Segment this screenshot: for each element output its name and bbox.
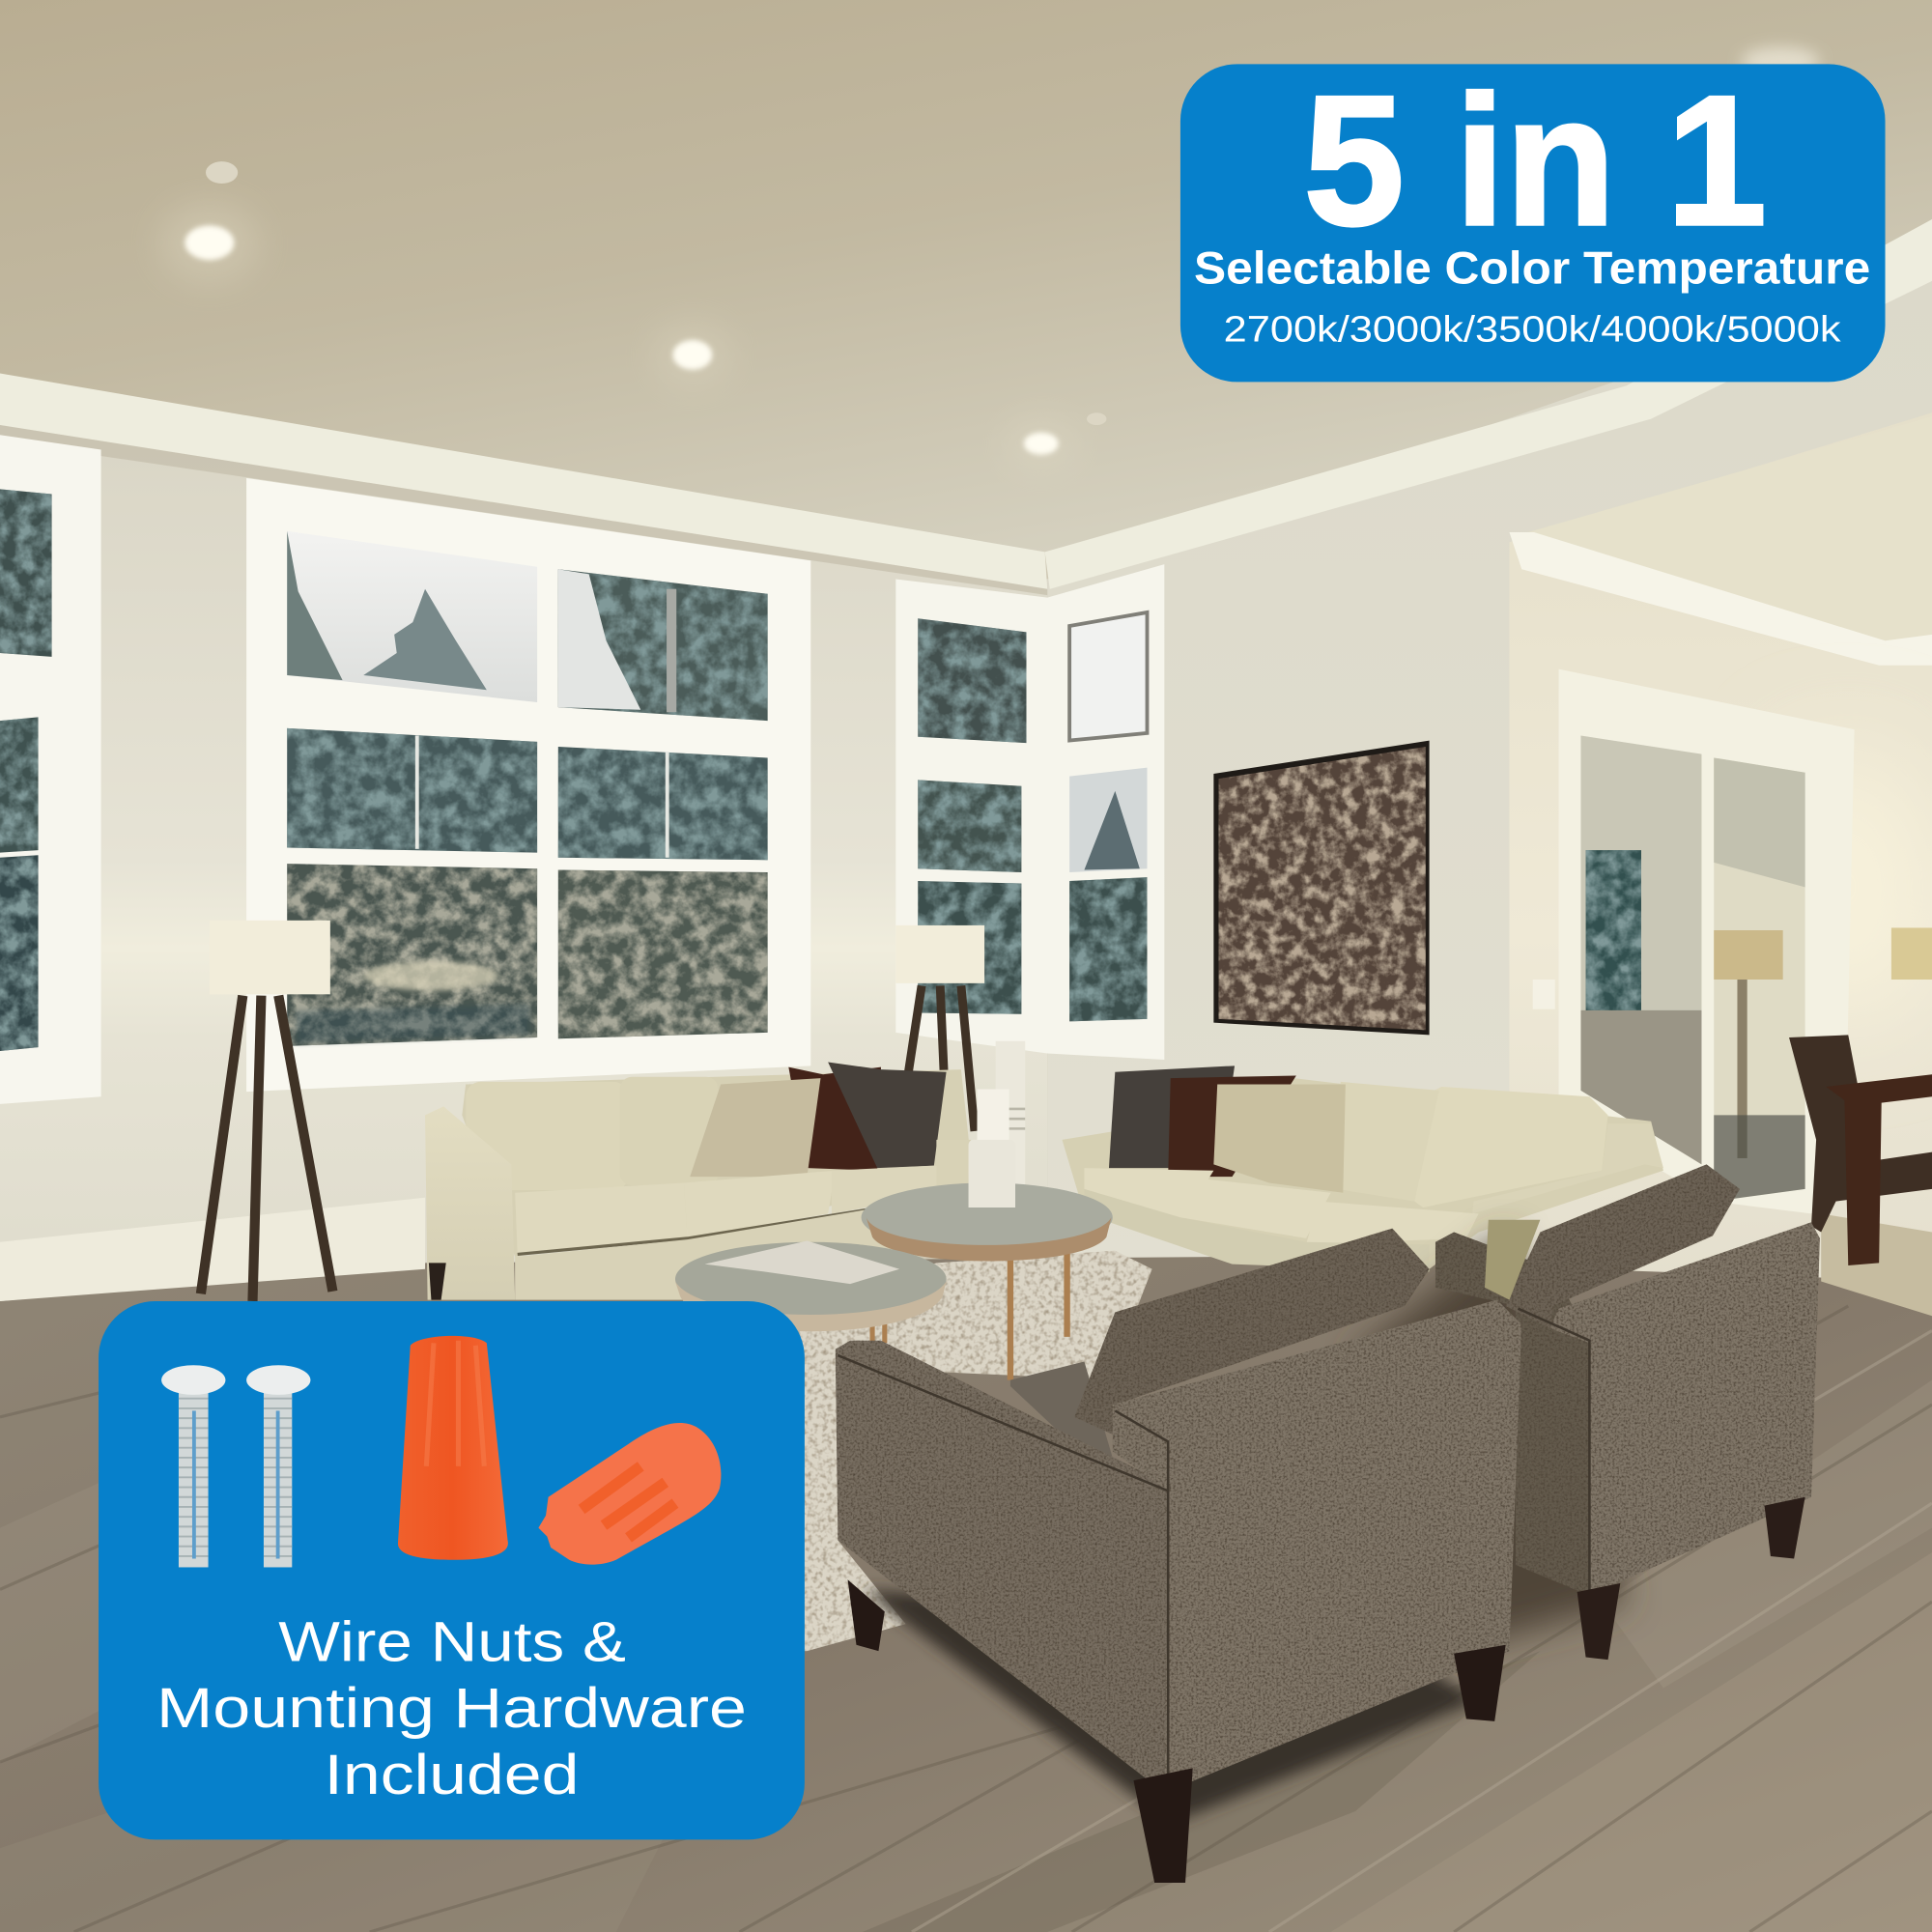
left sofa (425, 1062, 976, 1300)
sliding glass door (1559, 669, 1855, 1213)
caption text (156, 1610, 747, 1806)
panel background (99, 1301, 805, 1839)
large centre window (246, 478, 810, 1092)
corner windows (895, 564, 1164, 1060)
icon: orange wire nut upright (398, 1336, 508, 1560)
crown molding (0, 219, 1932, 595)
floor lamp right (895, 925, 984, 1131)
sofa base (515, 1193, 976, 1300)
subheading: Selectable Color Temperature (1194, 242, 1870, 294)
badge panel: 5 in 1 selectable color temperature (1180, 57, 1886, 382)
sofa backing (462, 1069, 974, 1257)
icon: mounting screw left (161, 1365, 225, 1567)
right wall (1047, 271, 1932, 1282)
far rug under dining table (1821, 1213, 1932, 1316)
glass table front with book (675, 1240, 947, 1343)
left partial window (0, 435, 101, 1104)
panel: wire nuts and mounting hardware (99, 1301, 805, 1839)
baseboard (0, 1198, 425, 1301)
adjoining room with lit wall (1509, 412, 1932, 1282)
armchair front (836, 1229, 1521, 1883)
armchair rear (1355, 1164, 1820, 1660)
white candle decor (969, 1041, 1025, 1208)
glass table back (862, 1182, 1113, 1380)
floor (0, 1257, 1932, 1932)
framed wall art (1213, 741, 1430, 1035)
icon: orange wire nut tilted (538, 1423, 721, 1565)
floor lamp left (201, 921, 332, 1301)
rug (788, 1251, 1152, 1651)
headline: 5 in 1: 5 in 1 (1303, 57, 1767, 264)
caption text: Mounting Hardware (156, 1677, 747, 1740)
left wall (0, 412, 1047, 1306)
badge background (1180, 64, 1886, 382)
icon: mounting screw right (246, 1365, 310, 1567)
sofa arm (425, 1106, 515, 1300)
dining table and chair (1789, 1035, 1932, 1265)
right sofa (1062, 1065, 1663, 1271)
ceiling lights (160, 46, 1820, 470)
wall switch (1533, 980, 1555, 1009)
ceiling (0, 0, 1932, 554)
far room lamp (1891, 927, 1932, 980)
caption text: Included (324, 1744, 579, 1806)
kelvin values: 2700k/3000k/3500k/4000k/5000k (1224, 308, 1842, 350)
caption text: Wire Nuts & (278, 1610, 626, 1673)
seat cushions (515, 1182, 688, 1254)
